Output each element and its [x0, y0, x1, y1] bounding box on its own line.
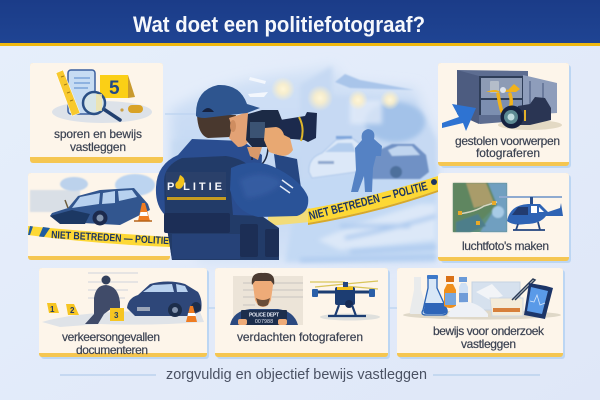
icon: suspect with placard: [230, 273, 303, 325]
vest: [164, 156, 279, 260]
icon: accident scene: 2: [70, 306, 75, 315]
officer photographing with camera: [156, 85, 317, 260]
panel: verkeersongeval met politielint: [28, 173, 170, 260]
strap: [252, 145, 268, 164]
panel: luchtfoto's maken: [438, 173, 571, 263]
icon: lab evidence: [403, 275, 561, 320]
icon: suspect with placard: POLICE DEPT: [249, 312, 279, 318]
label: vastleggen: [70, 140, 126, 154]
label: sporen en bewijs: [54, 127, 142, 141]
label: fotograferen: [476, 146, 540, 160]
scene: blurred street background behind the officer: [165, 66, 436, 264]
right police tape: [268, 176, 438, 226]
panel: gestolen voorwerpen fotograferen: [438, 63, 571, 168]
hand: [264, 127, 293, 156]
label: [455, 134, 560, 160]
torso: [156, 139, 278, 260]
icon: drone: [310, 281, 380, 320]
neck, face and hair: [197, 115, 236, 138]
background officer silhouette: [351, 129, 382, 192]
icon: accident scene: 3: [114, 311, 119, 320]
icon: helicopter: [499, 197, 563, 230]
icon: accident scene: [42, 273, 204, 327]
right police tape: NIET BETREDEN — POLITIE: [307, 179, 429, 223]
upper arm sleeve: [230, 162, 308, 217]
label: [54, 127, 142, 154]
panel: verdachten fotograferen: [215, 268, 390, 359]
icon: aerial photo: [453, 183, 507, 232]
panel: sporen en bewijs vastleggen: [30, 63, 163, 163]
camera: [246, 110, 282, 147]
label: documenteren: [76, 343, 148, 357]
panel: bewijs voor onderzoek vastleggen: [397, 268, 565, 359]
left police tape: NIET BETREDEN — POLITIE: [51, 229, 169, 247]
label: bewijs voor onderzoek: [433, 324, 545, 338]
icon: safe with jewels, camera and arrow: [442, 70, 562, 131]
header band: [0, 0, 600, 46]
card connector lines: [207, 307, 397, 309]
label: [433, 324, 545, 351]
label: verkeersongevallen: [62, 330, 160, 344]
POLITIE lettering: P LITIE: [167, 181, 222, 193]
title: Wat doet een politiefotograaf?: [133, 12, 425, 37]
scene: damaged car: [30, 174, 155, 226]
label: gestolen voorwerpen: [455, 134, 560, 148]
icon: suspect with placard: 007988: [255, 319, 273, 325]
tagline: zorgvuldig en objectief bewijs vastleggen: [166, 367, 427, 383]
badge: [175, 175, 184, 189]
left police tape: [28, 226, 170, 247]
label: verdachten fotograferen: [237, 330, 363, 344]
label: vastleggen: [461, 337, 516, 351]
icon: accident scene: 1: [50, 305, 55, 314]
background dark car: [368, 144, 429, 179]
forearm sleeve: [274, 154, 302, 195]
label: [62, 330, 160, 357]
cap: [196, 85, 260, 118]
panel: verkeersongevallen documenteren: [39, 268, 209, 359]
background police car: [309, 136, 370, 178]
icon: evidence with ruler, document, marker, magnifier and bullet: 5: [109, 78, 120, 99]
label: luchtfoto's maken: [462, 239, 549, 253]
